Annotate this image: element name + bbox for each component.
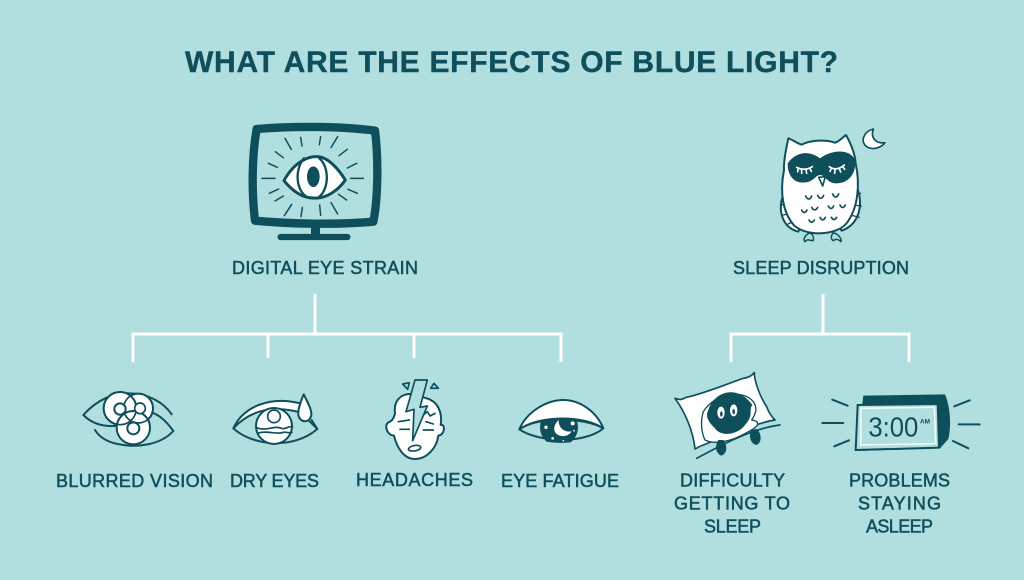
label: problems staying asleep: STAYING bbox=[858, 494, 941, 514]
label: digital eye strain: DIGITAL EYE STRAIN bbox=[232, 258, 418, 278]
label: problems staying asleep: ASLEEP bbox=[866, 516, 933, 536]
label: difficulty getting to sleep: DIFFICULTY bbox=[680, 470, 785, 490]
icon: alarm clock: 3:00 bbox=[868, 412, 918, 443]
icon: sheep on pillow bbox=[675, 372, 780, 458]
label: eye fatigue: EYE FATIGUE bbox=[501, 471, 619, 491]
label: problems staying asleep bbox=[849, 470, 950, 536]
label: difficulty getting to sleep bbox=[674, 470, 790, 536]
connector: sleep disruption tree bbox=[731, 294, 909, 362]
label: problems staying asleep: PROBLEMS bbox=[849, 470, 950, 490]
icon: owl with sleep mask bbox=[781, 129, 885, 242]
icon: alarm clock bbox=[822, 394, 980, 451]
title: WHAT ARE THE EFFECTS OF BLUE LIGHT? bbox=[185, 46, 838, 79]
icon: headache bbox=[386, 380, 444, 459]
icon: alarm clock: AM bbox=[920, 420, 930, 426]
icon: dry eyes bbox=[233, 394, 317, 444]
label: sleep disruption: SLEEP DISRUPTION bbox=[733, 258, 909, 278]
icon: monitor with eye bbox=[253, 127, 377, 237]
label: blurred vision: BLURRED VISION bbox=[56, 471, 213, 491]
connector: digital eye strain tree bbox=[133, 294, 561, 362]
label: headaches: HEADACHES bbox=[356, 470, 473, 490]
icon: eye fatigue bbox=[519, 400, 603, 446]
label: dry eyes: DRY EYES bbox=[230, 471, 319, 491]
label: difficulty getting to sleep: SLEEP bbox=[704, 516, 761, 536]
label: difficulty getting to sleep: GETTING TO bbox=[674, 494, 790, 514]
icon: blurred vision bbox=[83, 392, 173, 446]
